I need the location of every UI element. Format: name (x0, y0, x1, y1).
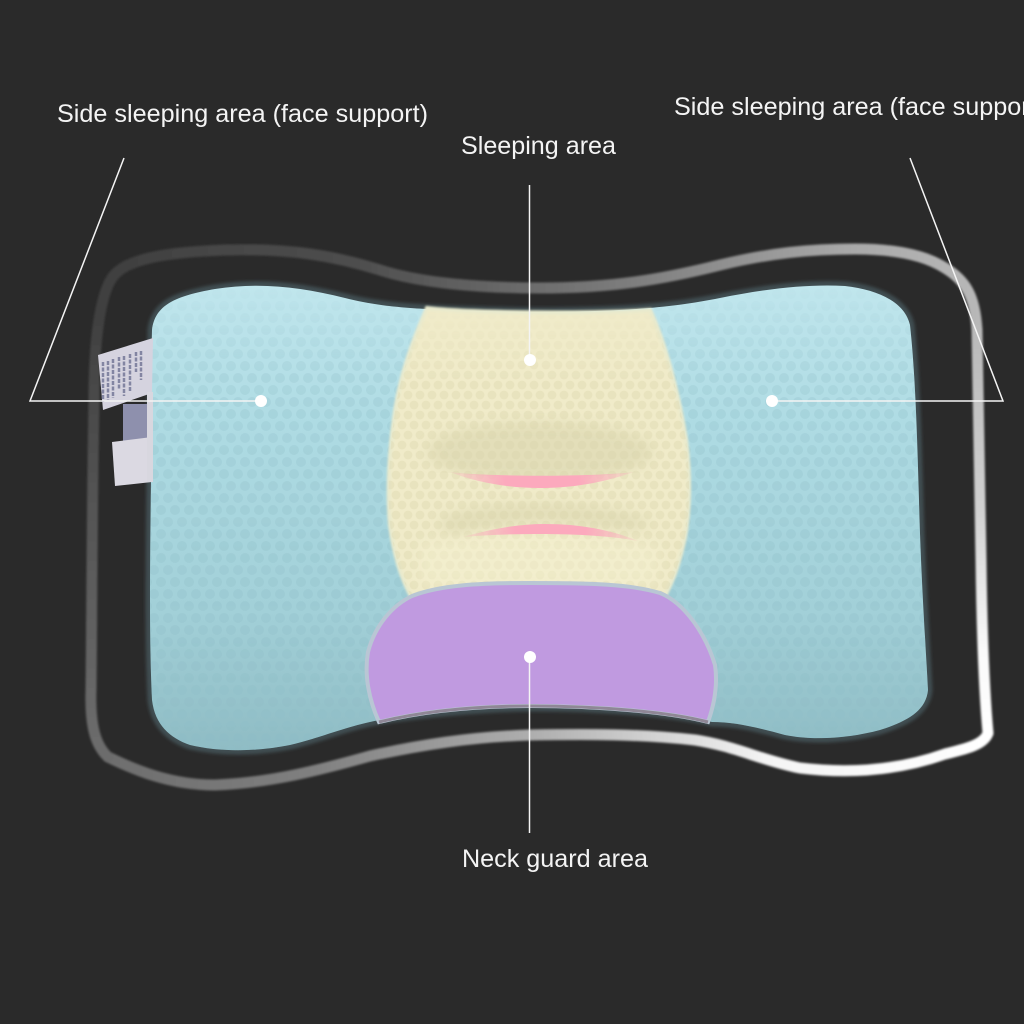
pillow outer contour outline (91, 249, 988, 785)
marker dot: sleeping area (524, 354, 536, 366)
contour top (112, 249, 977, 330)
middle label (123, 404, 152, 442)
blue side sleeping zones (150, 286, 928, 750)
leader line: neck guard area (528, 657, 530, 833)
pillow shadow edge (150, 286, 928, 750)
marker dot: right (766, 395, 778, 407)
bottom edge of neck zone shading (379, 706, 708, 722)
bottom label (112, 437, 152, 486)
top label (98, 338, 153, 410)
infographic: pillow zones (28, 97, 1024, 872)
lower pink slit (463, 524, 638, 541)
pillow (140, 280, 940, 760)
contour left (91, 278, 112, 757)
label: left side sleeping area: Side sleeping area (face support) (57, 100, 428, 128)
upper pink slit (450, 472, 634, 488)
leader line: right side sleeping area (772, 158, 1003, 401)
marker dot: neck guard (524, 651, 536, 663)
label stitched strip (147, 392, 153, 482)
leader line: left side sleeping area (30, 158, 261, 401)
yellow quilted texture (389, 356, 689, 594)
top label print (103, 351, 141, 402)
marker dot: left (255, 395, 267, 407)
contour bottom (108, 733, 988, 785)
yellow base (389, 308, 689, 598)
light band below lower fold (420, 535, 660, 585)
yellow sleeping zone (380, 308, 700, 600)
care labels (98, 338, 153, 486)
lower fold shadow (440, 504, 650, 535)
contour right (977, 330, 988, 733)
upper fold shadow (430, 422, 650, 476)
label: neck guard area: Neck guard area (462, 845, 648, 873)
blue quilted texture (152, 351, 916, 750)
label: sleeping area: Sleeping area (461, 132, 616, 160)
leader line: sleeping area (528, 185, 530, 360)
purple neck guard zone (367, 583, 716, 722)
